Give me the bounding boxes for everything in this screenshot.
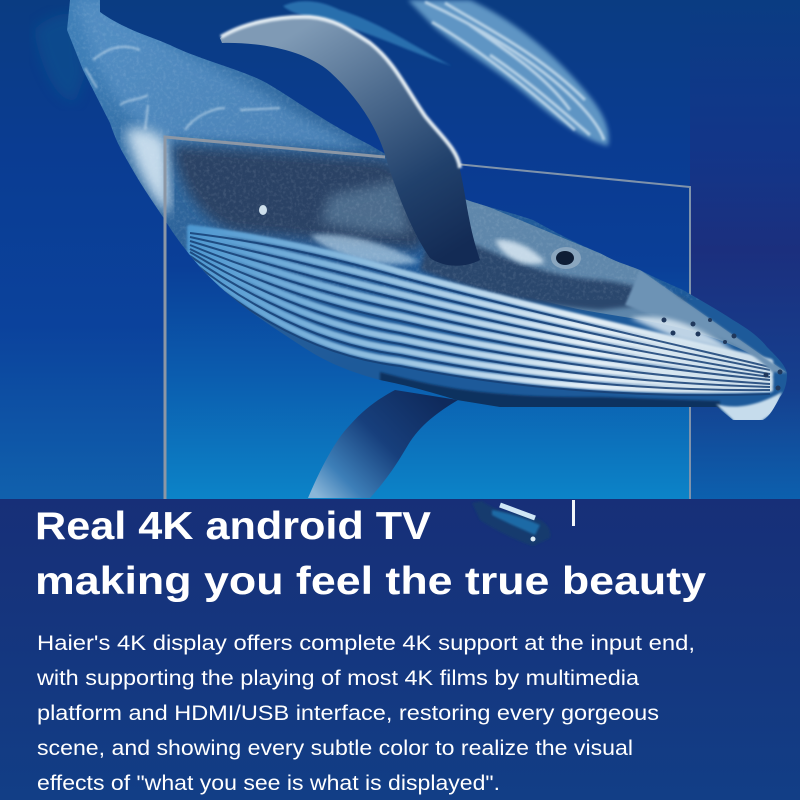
title: making you feel the true beauty bbox=[35, 560, 706, 603]
far whale flipper bbox=[283, 1, 452, 66]
groove shadows bbox=[190, 233, 770, 395]
chin highlight bbox=[716, 392, 782, 422]
small light marker bbox=[572, 500, 575, 526]
bottom text panel bbox=[0, 499, 800, 800]
small flank mark bbox=[259, 205, 267, 215]
dark head shadow bbox=[419, 242, 686, 312]
air tank bbox=[500, 505, 535, 518]
description text: scene, and showing every subtle color to realize the visual bbox=[37, 736, 633, 760]
humpback whale bbox=[50, 0, 800, 430]
whale body base bbox=[50, 0, 800, 430]
title: Real 4K android TV bbox=[35, 505, 431, 548]
far whale body bbox=[408, 0, 609, 146]
title bbox=[35, 505, 706, 603]
ocean background bbox=[0, 0, 800, 500]
raised flipper bbox=[220, 16, 480, 266]
head highlight bbox=[495, 240, 545, 264]
head tubercles bbox=[662, 318, 782, 390]
description text: with supporting the playing of most 4K films by multimedia bbox=[36, 666, 639, 690]
small whale in the distance bbox=[283, 0, 609, 146]
dark flank inside screen bbox=[172, 145, 440, 250]
flipper rim bbox=[221, 17, 460, 168]
description text bbox=[36, 631, 695, 795]
screen interior water bbox=[165, 137, 690, 500]
pale flank streak bbox=[310, 234, 420, 264]
description text: effects of "what you see is what is displayed". bbox=[37, 771, 500, 795]
ocean right of screen bbox=[690, 0, 800, 500]
pale back bbox=[75, 0, 370, 150]
whale eye bbox=[551, 247, 581, 269]
TV frame back edges bbox=[385, 157, 690, 499]
faint whale tail shadow bbox=[34, 13, 85, 102]
diver bbox=[472, 501, 550, 546]
throat grooves bbox=[190, 228, 770, 390]
lower flank tone bbox=[320, 180, 410, 233]
white flank patch bbox=[125, 128, 170, 215]
tail stock highlights bbox=[85, 47, 280, 130]
description text: Haier's 4K display offers complete 4K support at the input end, bbox=[37, 631, 695, 655]
dark underside bbox=[380, 372, 720, 412]
lower flipper bbox=[308, 390, 458, 498]
description text: platform and HDMI/USB interface, restoring every gorgeous bbox=[37, 701, 659, 725]
head upper bbox=[440, 195, 787, 373]
snout top bbox=[625, 270, 787, 373]
snout highlight bbox=[630, 317, 735, 352]
TV frame front edges bbox=[165, 137, 385, 499]
skin texture bbox=[68, 0, 699, 300]
